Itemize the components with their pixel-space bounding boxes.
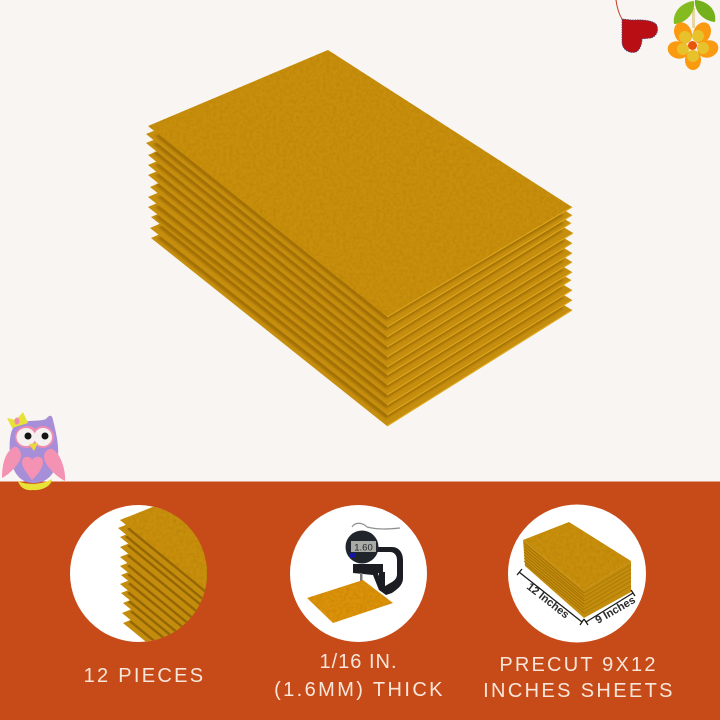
dimension line: 12 inches: 12 Inches	[524, 581, 571, 621]
label: size: PRECUT 9X12	[499, 654, 658, 676]
white circle with close-up stack	[70, 505, 207, 642]
white circle with thickness gauge	[290, 505, 427, 642]
icon: felt owl	[2, 412, 65, 490]
label: thickness: (1.6MM) THICK	[274, 679, 445, 701]
label: size: INCHES SHEETS	[483, 680, 675, 702]
label: thickness: 1/16 IN.	[319, 651, 398, 673]
label: 12 pieces: 12 PIECES	[84, 665, 205, 687]
icon: felt heart ornament	[616, 0, 658, 53]
panel: 12 pieces	[70, 505, 207, 682]
main product: stack of 12 felt sheets	[146, 50, 573, 426]
icon: felt flower with green leaves	[665, 0, 720, 70]
small felt stack	[523, 522, 631, 618]
label: thickness	[274, 651, 445, 701]
orange footer band	[0, 482, 720, 720]
white circle with dimensioned stack	[508, 504, 646, 642]
dimension line: 9 inches: 9 Inches	[594, 594, 638, 627]
icon: digital thickness gauge: 1.60	[354, 542, 373, 554]
panel: thickness	[274, 505, 445, 701]
panel: size	[483, 504, 675, 702]
felt sample square	[307, 580, 393, 623]
label: size	[483, 654, 675, 702]
